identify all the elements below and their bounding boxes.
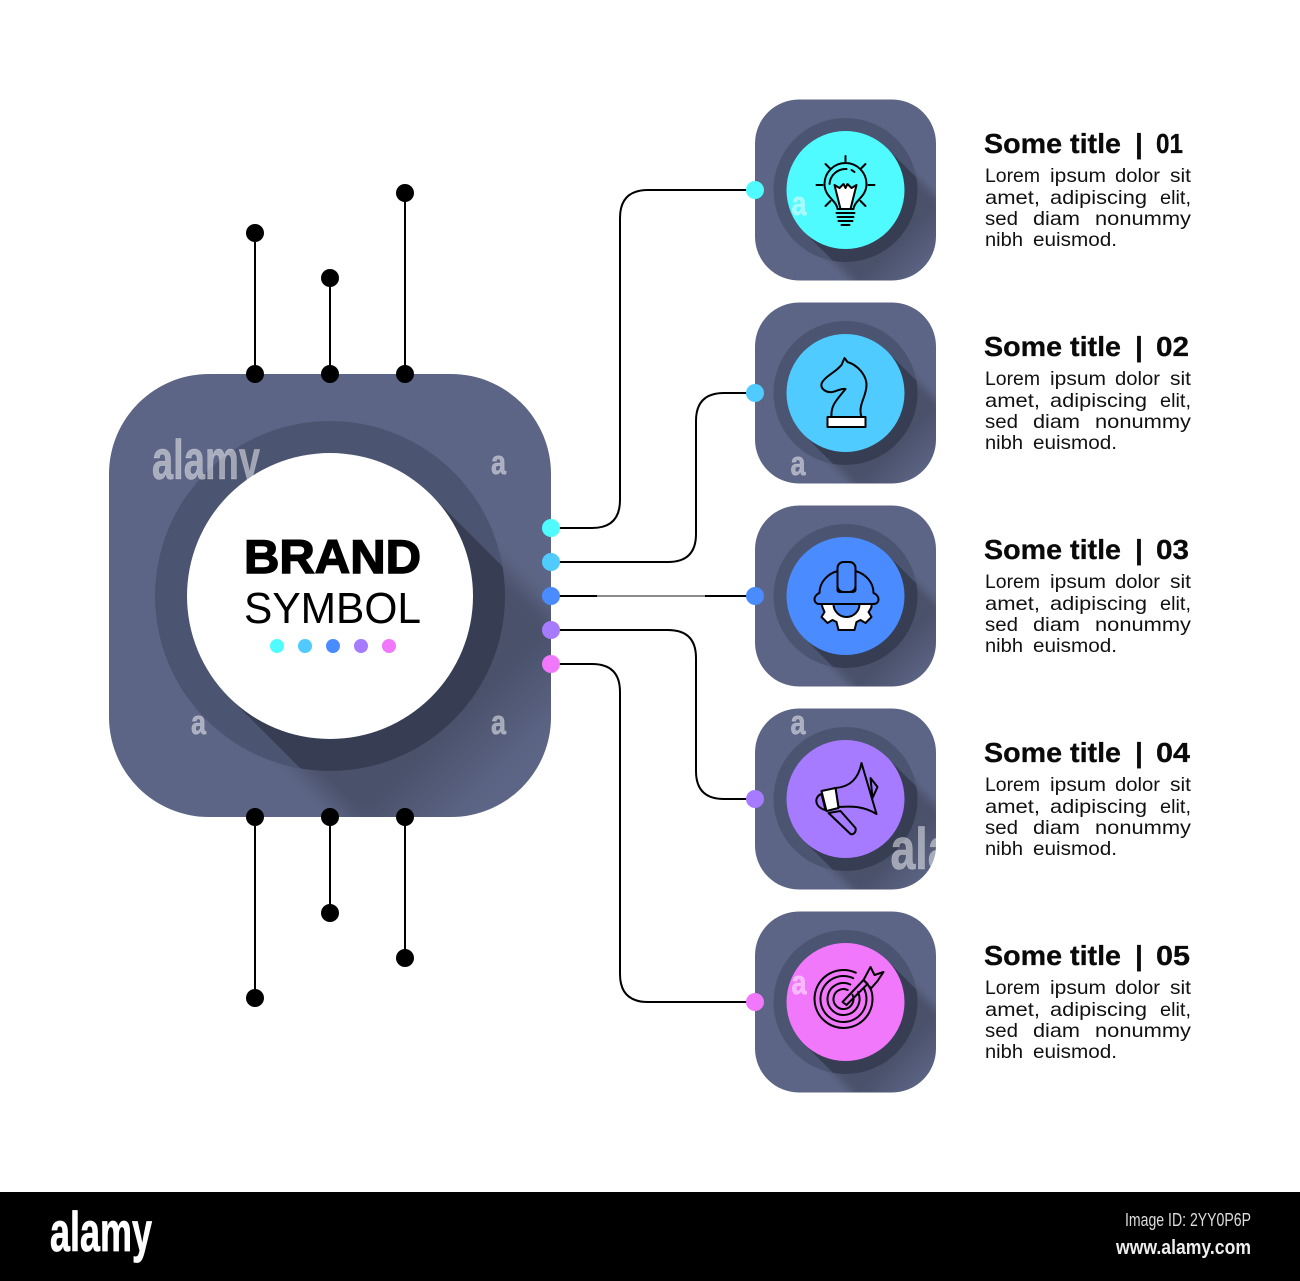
- description: adipiscing: [1050, 999, 1147, 1021]
- text block: item 04: [984, 737, 1192, 860]
- description: amet,: [985, 187, 1040, 209]
- description: elit,: [1160, 390, 1191, 412]
- description: nonummy: [1095, 817, 1191, 839]
- description: dolor: [1115, 165, 1161, 187]
- panel: card 04: [746, 708, 936, 890]
- description: Lorem: [985, 774, 1040, 796]
- title: [984, 331, 1189, 362]
- panel: card 01: a: [792, 185, 807, 223]
- description: ipsum: [1050, 774, 1106, 796]
- footer bar: [0, 1192, 1300, 1281]
- description: nibh: [985, 838, 1023, 860]
- description: amet,: [985, 390, 1040, 412]
- icon: hard hat and gear: [814, 562, 878, 630]
- footer logo: alamy: [50, 1200, 152, 1263]
- bottom connector pins: [246, 808, 414, 1007]
- panel: central hub: alamy: [152, 428, 260, 491]
- panel: card 04: ala: [890, 817, 953, 882]
- description: diam: [1033, 1020, 1080, 1042]
- description: diam: [1033, 817, 1080, 839]
- description: sit: [1170, 977, 1192, 999]
- panel: card 03: [746, 506, 936, 686]
- title: Some title: [984, 940, 1121, 971]
- description: Lorem: [985, 571, 1040, 593]
- description: nibh: [985, 229, 1023, 251]
- description: amet,: [985, 593, 1040, 615]
- connector lines from hub to cards: [551, 190, 755, 1002]
- icon: chess knight: [821, 358, 866, 427]
- description: Lorem: [985, 368, 1040, 390]
- description: elit,: [1160, 187, 1191, 209]
- text block: item 03: [984, 534, 1192, 657]
- hub output dots: [542, 519, 560, 673]
- description: ipsum: [1050, 977, 1106, 999]
- description: nonummy: [1095, 1020, 1191, 1042]
- description: sit: [1170, 571, 1192, 593]
- description: elit,: [1160, 593, 1191, 615]
- title: [984, 940, 1190, 971]
- description: nonummy: [1095, 614, 1191, 636]
- website: www.alamy.com: [1115, 1237, 1251, 1259]
- description: ipsum: [1050, 165, 1106, 187]
- title: [984, 128, 1183, 159]
- description: adipiscing: [1050, 796, 1147, 818]
- description: [985, 165, 1192, 251]
- description: euismod.: [1033, 1041, 1117, 1063]
- text block: item 05: [984, 940, 1192, 1063]
- description: sit: [1170, 774, 1192, 796]
- title: |: [1135, 331, 1143, 362]
- port dot: [746, 384, 764, 402]
- description: euismod.: [1033, 838, 1117, 860]
- description: adipiscing: [1050, 390, 1147, 412]
- icon: target with arrow: [815, 967, 884, 1028]
- title: |: [1135, 128, 1143, 159]
- description: euismod.: [1033, 635, 1117, 657]
- panel: card 05: a: [792, 964, 807, 1002]
- description: dolor: [1115, 774, 1161, 796]
- title: Some title: [984, 128, 1121, 159]
- title: Some title: [984, 737, 1121, 768]
- colour dots row: [270, 639, 396, 653]
- panel: card 05: [746, 912, 936, 1092]
- icon: light bulb: [816, 156, 874, 225]
- description: sed: [985, 1020, 1018, 1042]
- title: |: [1135, 534, 1143, 565]
- title: 04: [1156, 737, 1190, 768]
- description: diam: [1033, 614, 1080, 636]
- description: sit: [1170, 368, 1192, 390]
- description: elit,: [1160, 999, 1191, 1021]
- description: adipiscing: [1050, 187, 1147, 209]
- description: Lorem: [985, 977, 1040, 999]
- title: 01: [1156, 128, 1183, 159]
- description: nibh: [985, 432, 1023, 454]
- icon: megaphone: [816, 763, 878, 834]
- description: diam: [1033, 411, 1080, 433]
- description: diam: [1033, 208, 1080, 230]
- description: ipsum: [1050, 368, 1106, 390]
- description: ipsum: [1050, 571, 1106, 593]
- panel: central hub: a: [491, 444, 507, 482]
- description: nonummy: [1095, 411, 1191, 433]
- text block: item 01: [984, 128, 1192, 251]
- description: elit,: [1160, 796, 1191, 818]
- description: dolor: [1115, 571, 1161, 593]
- description: [985, 977, 1192, 1063]
- description: euismod.: [1033, 229, 1117, 251]
- description: adipiscing: [1050, 593, 1147, 615]
- image id: Image ID: 2YY0P6P: [1125, 1210, 1251, 1230]
- description: sed: [985, 614, 1018, 636]
- text block: item 02: [984, 331, 1192, 454]
- port dot: [746, 993, 764, 1011]
- panel: card 01: [746, 100, 936, 280]
- title: Some title: [984, 331, 1121, 362]
- description: Lorem: [985, 165, 1040, 187]
- description: [985, 774, 1192, 860]
- description: amet,: [985, 796, 1040, 818]
- panel: card 04: a: [790, 704, 806, 742]
- title: Some title: [984, 534, 1121, 565]
- port dot: [746, 790, 764, 808]
- description: [985, 368, 1192, 454]
- description: sed: [985, 817, 1018, 839]
- top connector pins: [246, 184, 414, 383]
- description: sed: [985, 411, 1018, 433]
- panel: card 02: [746, 302, 936, 484]
- title: |: [1135, 940, 1143, 971]
- title: 05: [1156, 940, 1190, 971]
- title: [984, 737, 1190, 768]
- description: sit: [1170, 165, 1192, 187]
- description: nibh: [985, 1041, 1023, 1063]
- heading: symbol: SYMBOL: [244, 584, 421, 633]
- title: [984, 534, 1189, 565]
- port dot: [746, 181, 764, 199]
- title: |: [1135, 737, 1143, 768]
- description: [985, 571, 1192, 657]
- description: amet,: [985, 999, 1040, 1021]
- description: euismod.: [1033, 432, 1117, 454]
- description: dolor: [1115, 368, 1161, 390]
- panel: card 02: a: [790, 445, 806, 483]
- description: nonummy: [1095, 208, 1191, 230]
- panel: central hub: a: [191, 704, 207, 742]
- panel: central hub: a: [491, 704, 507, 742]
- heading: brand: BRAND: [244, 530, 421, 583]
- description: sed: [985, 208, 1018, 230]
- title: 02: [1156, 331, 1189, 362]
- panel: central hub: [109, 374, 551, 817]
- description: dolor: [1115, 977, 1161, 999]
- description: nibh: [985, 635, 1023, 657]
- title: 03: [1156, 534, 1189, 565]
- port dot: [746, 587, 764, 605]
